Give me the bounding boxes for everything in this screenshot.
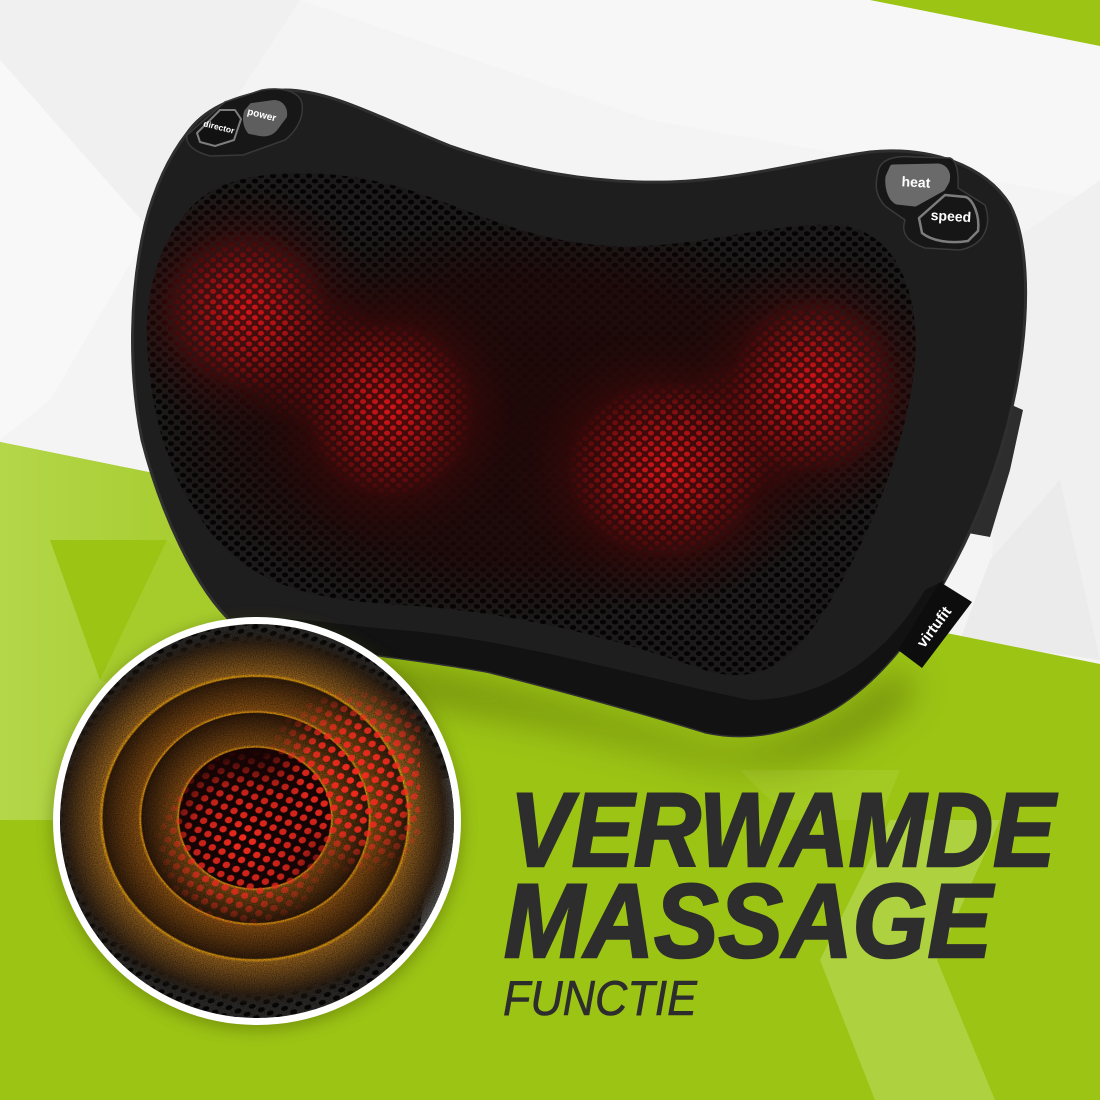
buttons top left: power and director: [187, 89, 302, 156]
mesh panel: [146, 174, 916, 675]
fabric tag: virtufit: [898, 582, 972, 668]
lower edge shade: [235, 580, 945, 736]
title line: FUNCTIE: FUNCTIE: [503, 972, 698, 1026]
buttons top right: heat and speed: heat: [901, 173, 931, 191]
buttons top right: heat and speed: speed: [930, 207, 972, 225]
red mesh dots: [158, 688, 420, 927]
background: green corner top right: [870, 0, 1100, 46]
pillow body: [133, 90, 1026, 736]
concentric heat rings: [50, 628, 460, 1008]
buttons top right: heat and speed: [876, 157, 988, 250]
fabric tag: virtufit: virtufit: [914, 604, 955, 651]
side strap: [968, 402, 1023, 537]
background: green lower area with facets: [0, 442, 1100, 1100]
red glowing heat zones: [164, 234, 896, 556]
buttons top left: power and director: power: [246, 107, 277, 124]
zoom circle: heated massage detail: [50, 610, 470, 1030]
title line: MASSAGE: MASSAGE: [504, 863, 995, 980]
pillow drop shadow: [290, 650, 915, 764]
title: [503, 772, 1058, 1026]
grain: [60, 624, 454, 1018]
buttons top left: power and director: director: [202, 118, 236, 136]
pillow massager product: [110, 89, 1026, 736]
